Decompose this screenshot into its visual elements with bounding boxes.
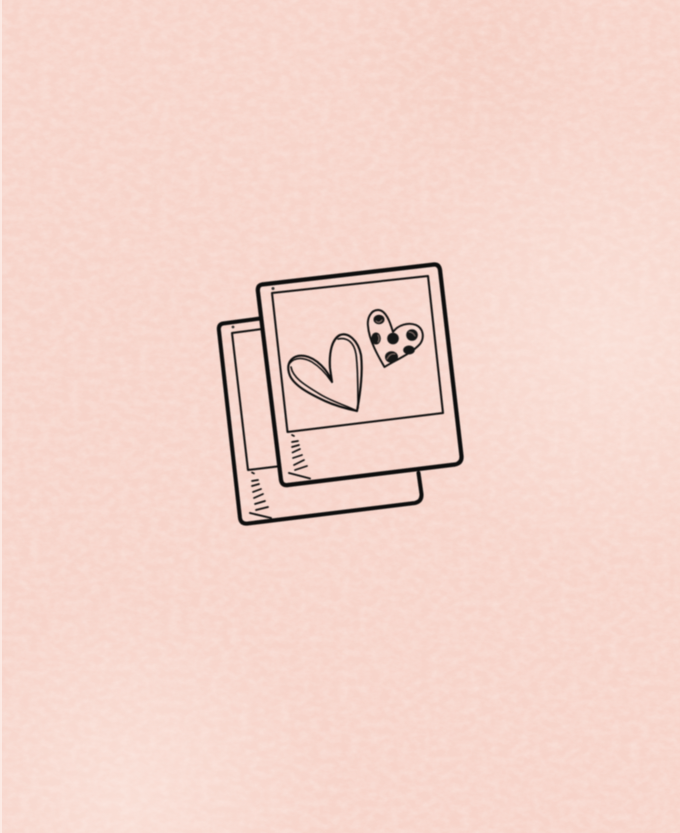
front photo corner mark xyxy=(272,287,274,290)
heart outline xyxy=(368,310,423,367)
back photo window xyxy=(232,329,277,470)
dot highlights xyxy=(376,320,415,359)
icon: outlined heart xyxy=(288,334,362,411)
front photo shading hatches xyxy=(289,435,310,478)
heart dots xyxy=(371,315,418,363)
front photo window xyxy=(272,276,443,432)
back photo shading hatches xyxy=(250,472,271,518)
back photo frame xyxy=(219,318,422,524)
back photo xyxy=(219,318,422,524)
front photo xyxy=(258,264,462,485)
icon: polka-dot heart xyxy=(368,310,423,367)
back photo corner mark xyxy=(232,326,234,328)
front photo frame xyxy=(258,264,462,485)
illustration: two stacked instant photos xyxy=(219,264,462,524)
